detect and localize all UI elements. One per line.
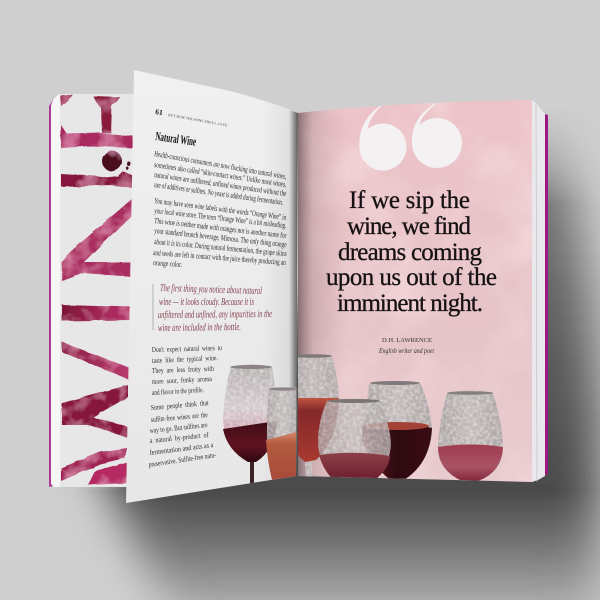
wine glass: large on left page: [223, 364, 277, 492]
body text: your local wine store. The term “Orange Wine” is a bit misleading.: [154, 206, 287, 230]
body text: and seeds are left in contact with the juice thereby producing an: [153, 248, 286, 267]
quote text: upon us out of the: [326, 264, 497, 291]
body text: orange color.: [153, 258, 182, 269]
lower body text: preservative. Sulfite-free natu-: [148, 450, 217, 469]
pull quote: wine are included in the bottle.: [158, 322, 241, 334]
right page stack: [532, 100, 548, 482]
attribution: D.H. LAWRENCE: [382, 337, 432, 344]
left page block: [49, 94, 135, 487]
heading: Natural Wine: [155, 129, 197, 149]
book shadow: [110, 110, 600, 600]
body text: sometimes also called “skin-contact wines.” Unlike most wines,: [154, 160, 287, 189]
lower body text: a natural by-product of: [149, 430, 209, 445]
lower body text: [148, 343, 222, 469]
body text: natural wines are unfiltered, unfined wines produced without the: [154, 170, 287, 198]
pull quote: The first thing you notice about natural: [160, 283, 262, 297]
lower body text: Some people think that: [150, 398, 210, 412]
pull quote: [153, 283, 272, 334]
lower body text: sulfite-free wines are the: [150, 410, 208, 424]
page number and running head: [155, 107, 228, 128]
right page: pink watercolor: [285, 95, 535, 485]
lower body text: fermentation and acts as a: [149, 440, 214, 457]
body text: use of additives or sulfites. No yeast is added during fermentation.: [154, 180, 284, 207]
body text: your standard brunch beverage, Mimosa. The only thing orange: [154, 226, 287, 249]
wine glass: right: [438, 390, 503, 481]
attribution: English writer and poet: [378, 346, 435, 355]
lower body text: They are less fruity with: [152, 364, 214, 375]
quote text: wine, we find: [347, 213, 472, 240]
quote text: [326, 187, 497, 317]
body text: about it is its color. During natural fermentation, the grape skins: [154, 237, 287, 258]
quote text: imminent night.: [337, 290, 483, 317]
wine glass: tall behind gutter: [298, 354, 339, 476]
lower body text: more sour, funky aroma: [152, 374, 213, 386]
attribution: [378, 337, 435, 355]
lower body text: and flavor in the profile.: [152, 385, 204, 397]
pull quote: wine — it looks cloudy. Because it is: [159, 297, 254, 308]
quotation marks: [359, 102, 462, 170]
wine glass: dark rear: [362, 381, 432, 481]
flipped text page: [126, 70, 300, 503]
page number and running head: BUT HOW THE WINE SHE'LL LOVE: [168, 113, 228, 128]
lower body text: taste like the typical wine.: [152, 353, 218, 365]
page number and running head: 61: [155, 107, 164, 117]
wine glass: flute at gutter: [266, 387, 296, 480]
quote text: If we sip the: [349, 187, 470, 214]
watercolor WINE lettering: [60, 95, 133, 485]
body text: You may have seen wine labels with the words “Orange Wine” in: [154, 196, 287, 222]
pull quote: unfiltered and unfined, any impurities in the: [158, 309, 272, 321]
lower body text: way to go. But sulfites are: [149, 420, 208, 435]
lower body text: Don't expect natural wines to: [152, 343, 222, 354]
body text: Health-conscious consumers are now flocking into natural wines,: [154, 149, 287, 181]
body text: [153, 149, 287, 269]
quote text: dreams coming: [338, 239, 482, 266]
body text: This wine is neither made with oranges nor is another name for: [154, 216, 287, 240]
wine glass: front centre: [318, 398, 391, 482]
